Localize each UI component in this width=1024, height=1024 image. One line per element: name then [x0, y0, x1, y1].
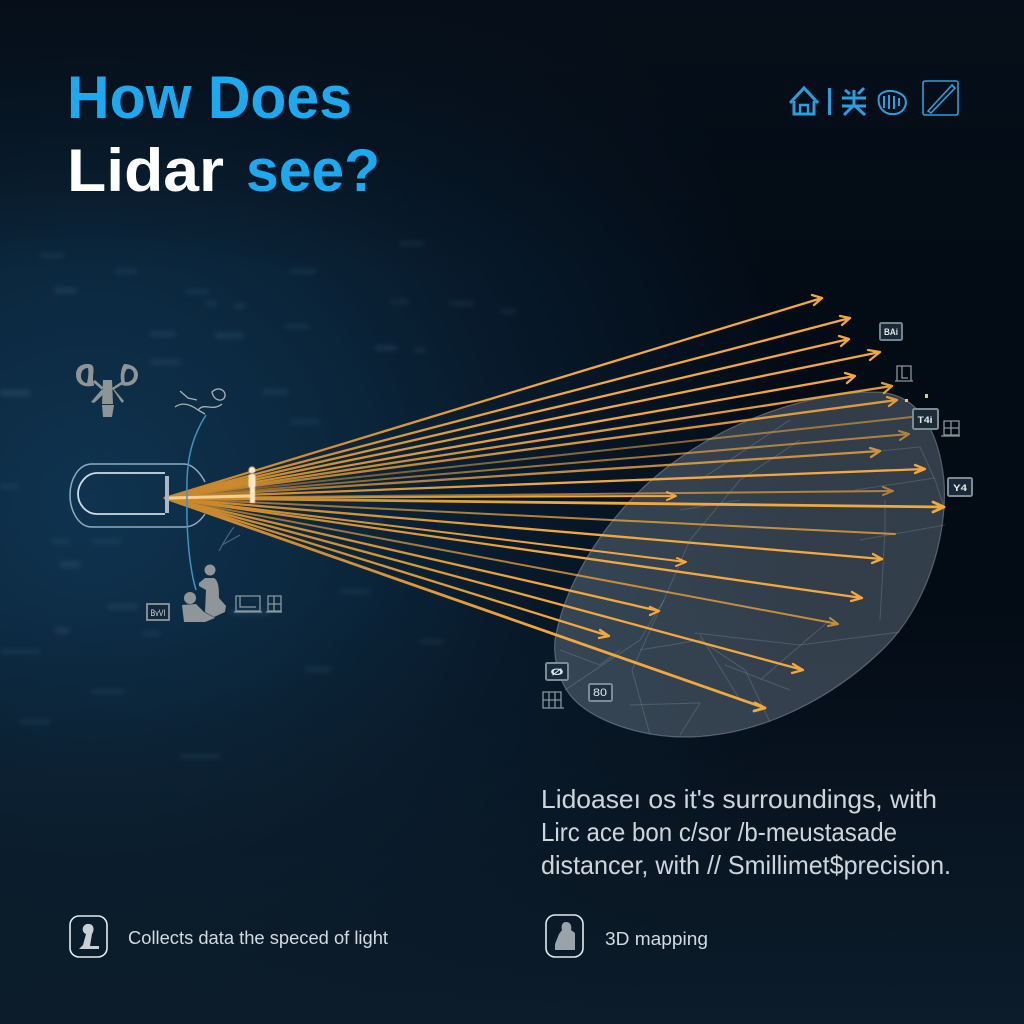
feature: collects data [70, 916, 388, 957]
title [67, 64, 380, 204]
title line: see?: see? [246, 137, 380, 204]
ray set lower [165, 498, 895, 711]
label: left tag: BvVI [150, 608, 166, 618]
feature text: 3D mapping [605, 929, 708, 949]
tag: dial [546, 663, 568, 680]
ray set upper [165, 295, 944, 512]
description paragraph [541, 784, 951, 880]
icon: feature two [546, 915, 583, 957]
tag: T4: T4i [918, 415, 932, 425]
scan surface [555, 392, 945, 737]
tag: 80 [589, 684, 612, 701]
description paragraph: Lirc ace bon c/sor /b-meustasade [541, 817, 897, 847]
icon: two people [182, 564, 226, 622]
feature text: Collects data the speced of light [128, 928, 388, 948]
tag: BA [880, 323, 902, 340]
tag: Y4 [948, 478, 972, 496]
icon: small panels [234, 596, 282, 612]
laser rays [165, 295, 944, 711]
icon: building right [941, 421, 960, 436]
labels around scan edge [543, 323, 972, 708]
tag: BA: BAi [884, 327, 898, 337]
center beam highlight [170, 496, 250, 498]
icon: divider bar [828, 88, 831, 115]
icon: pencil box [923, 81, 958, 115]
icon: glyph [842, 88, 866, 115]
description paragraph: Lidoaseı os it's surroundings, with [541, 784, 937, 814]
blue signal arc [187, 415, 206, 590]
icon: bird sketch [175, 389, 225, 414]
feature: 3D mapping [546, 915, 708, 957]
tag: 80: 80 [593, 687, 607, 699]
tag: dial: Ø [550, 667, 564, 677]
title line: How Does: How Does [67, 64, 352, 131]
title line: Lidar: Lidar [67, 137, 224, 204]
label: left tag [147, 604, 169, 620]
icon: feature one [70, 916, 107, 957]
car outline [70, 464, 205, 527]
tag: Y4: Y4 [953, 483, 967, 493]
dots [905, 394, 928, 402]
icon: hand [879, 91, 906, 114]
icon: pedestrian in beam [248, 467, 256, 503]
icon: small sketch mark [219, 527, 240, 551]
icon: grid block [543, 692, 564, 708]
map lines [560, 420, 945, 735]
icon: building top [895, 366, 913, 381]
top-right icon row [790, 81, 958, 115]
description paragraph: distancer, with // Smillimet$precision. [541, 850, 951, 880]
icon: drone [76, 364, 138, 417]
tag: T4 [913, 409, 938, 429]
icon: house [790, 88, 818, 114]
